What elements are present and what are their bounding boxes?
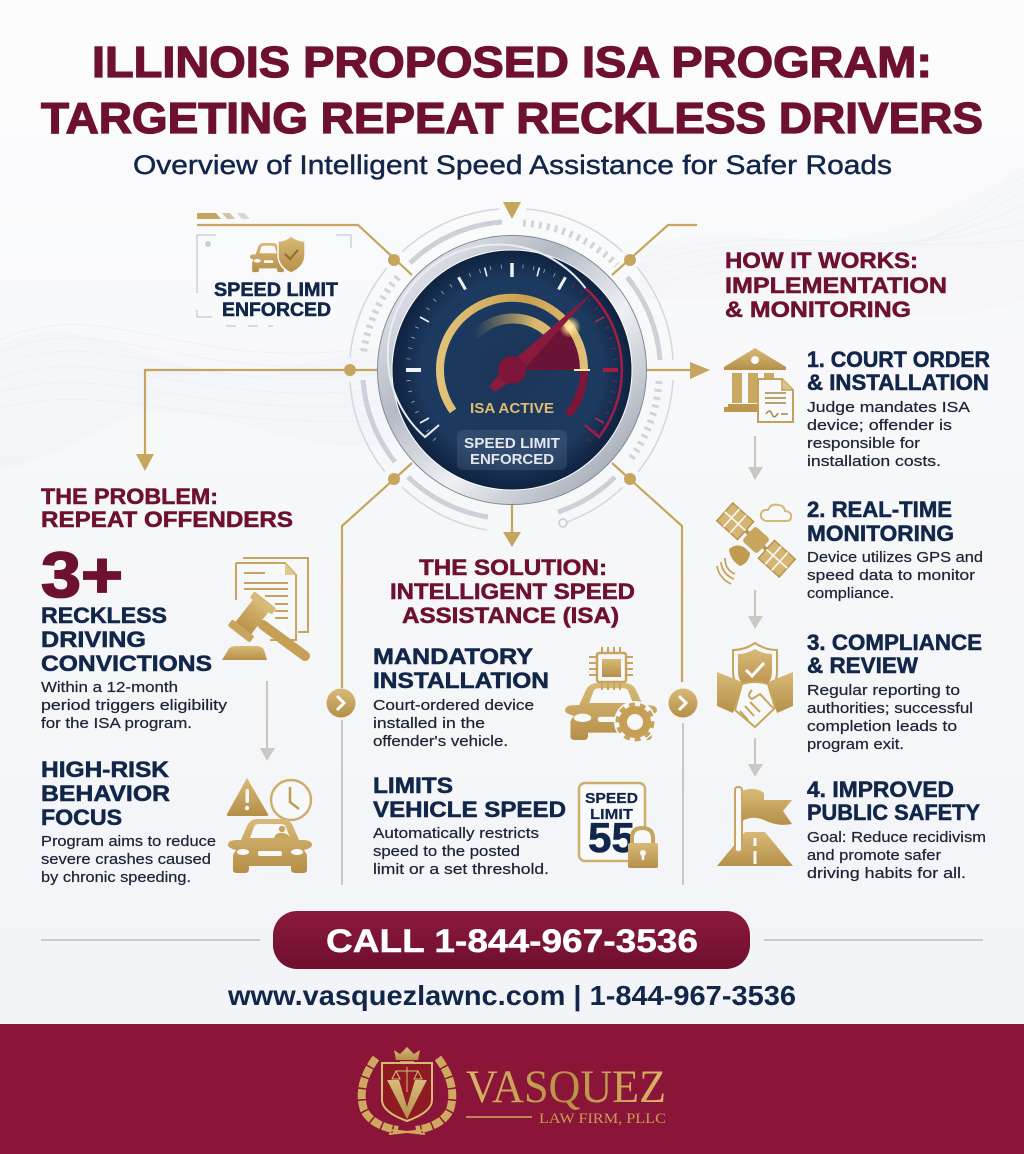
icon: car and shield (250, 236, 305, 273)
step 2 text: Device utilizes GPS and (807, 550, 983, 566)
background wave: left (0, 324, 400, 470)
step 4 text: driving habits for all. (807, 866, 966, 882)
heading: the problem (41, 484, 293, 532)
stat: 3+: 3+ (41, 539, 123, 611)
installation description: offender's vehicle. (373, 734, 508, 750)
high-risk description: by chronic speeding. (41, 870, 191, 886)
panel: speed limit enforced badge (197, 213, 351, 326)
step 1 heading: & INSTALLATION (807, 370, 989, 395)
heading: how it works: IMPLEMENTATION (725, 273, 947, 298)
gauge inner arcs (474, 318, 550, 336)
icon: speed limit sign and lock: LIMIT (590, 807, 633, 823)
step 3 heading: & REVIEW (807, 653, 919, 678)
heading: mandatory installation: INSTALLATION (373, 668, 549, 693)
panel: the solution (373, 555, 658, 878)
step 1 text: installation costs. (807, 454, 941, 470)
connector: bottom left (326, 463, 412, 885)
step 2 text (807, 550, 983, 602)
arrow down (748, 590, 763, 629)
stat label: DRIVING (41, 627, 146, 652)
step 3 heading (807, 630, 982, 678)
step 1 text (807, 400, 970, 470)
step 2 (807, 497, 983, 602)
badge text: ENFORCED (222, 299, 331, 321)
heading: high-risk behavior focus: HIGH-RISK (41, 757, 170, 782)
step 2 heading: 2. REAL-TIME (807, 497, 952, 522)
badge text (214, 279, 338, 321)
heading: high-risk behavior focus: FOCUS (41, 805, 122, 830)
step 3 text (807, 683, 973, 753)
step 1 (807, 347, 990, 470)
connector: top left (197, 225, 412, 275)
limits description: Automatically restricts (373, 826, 539, 842)
stat label: CONVICTIONS (41, 651, 212, 676)
gauge gold arc (440, 298, 584, 411)
heading: the solution: THE SOLUTION: (419, 555, 607, 580)
stat label (41, 603, 212, 676)
decorative tabs (197, 213, 250, 219)
icon: shield and handshake (717, 643, 793, 727)
heading: mandatory installation: MANDATORY (373, 644, 533, 669)
high-risk description: severe crashes caused (41, 852, 211, 868)
installation description: installed in the (373, 716, 485, 732)
heading: mandatory installation (373, 644, 549, 693)
step 4 heading: 4. IMPROVED (807, 777, 954, 802)
heading: the solution: INTELLIGENT SPEED (390, 579, 635, 604)
icon: speed limit sign and lock (579, 783, 658, 868)
installation description: Court-ordered device (373, 698, 534, 714)
heading: limits vehicle speed: LIMITS (373, 773, 453, 798)
gauge maroon arc (568, 370, 584, 415)
step 1 text: Judge mandates ISA (807, 400, 970, 416)
arrow down (748, 436, 763, 480)
logo subline: LAW FIRM, PLLC (539, 1111, 666, 1127)
title: ILLINOIS PROPOSED ISA PROGRAM: (92, 38, 932, 87)
gauge major ticks (406, 263, 618, 423)
heading: how it works (725, 248, 947, 322)
panel: the problem (41, 484, 312, 886)
arrow down (748, 738, 763, 777)
limits description: speed to the posted (373, 844, 520, 860)
step 3 text: completion leads to (807, 719, 957, 735)
speed limit enforced display: SPEED LIMIT (464, 435, 560, 452)
arrow: gauge to how it works (647, 362, 710, 379)
gauge white arc (388, 244, 586, 437)
connector: top right (612, 225, 697, 275)
panel: how it works (717, 248, 990, 882)
step 3 text: authorities; successful (807, 701, 973, 717)
speed limit enforced display (457, 430, 567, 470)
icon: satellite (717, 503, 795, 584)
step 4 heading: PUBLIC SAFETY (807, 800, 980, 825)
logo wordmark: VASQUEZ (466, 1061, 666, 1113)
contact line: www.vasquezlawnc.com | 1-844-967-3536 (227, 980, 796, 1011)
subtitle: Overview of Intelligent Speed Assistance for Safer Roads (133, 150, 892, 180)
gauge minor ticks (406, 264, 618, 442)
step 2 text: speed data to monitor (807, 568, 975, 584)
speedometer gauge (377, 235, 647, 505)
heading: how it works: & MONITORING (725, 297, 911, 322)
gauge red zone arc (585, 288, 622, 437)
icon: warning, clock and car (227, 778, 312, 873)
arrow: gauge to the problem (136, 364, 377, 471)
badge text: SPEED LIMIT (214, 279, 338, 301)
stat description (41, 680, 228, 732)
speed limit enforced display: ENFORCED (470, 451, 554, 468)
step 2 heading: MONITORING (807, 521, 954, 546)
logo (362, 1047, 666, 1134)
step 3 text: Regular reporting to (807, 683, 960, 699)
step 1 heading (807, 347, 990, 395)
call to action: CALL 1-844-967-3536 (326, 923, 698, 959)
ISA active label: ISA ACTIVE (470, 400, 554, 417)
icon: courthouse and document (724, 348, 793, 422)
step 4 text (807, 830, 986, 882)
step 3 (807, 630, 982, 753)
top marker triangle (503, 202, 521, 219)
heading: the problem: REPEAT OFFENDERS (41, 507, 293, 532)
step 1 heading: 1. COURT ORDER (807, 347, 990, 372)
title (41, 38, 983, 143)
gauge red wedge (524, 318, 582, 370)
background wave: right (640, 165, 1024, 316)
call to action (41, 911, 983, 969)
arrow: gauge to solution (503, 503, 521, 547)
heading: limits vehicle speed (373, 773, 566, 822)
installation description (373, 698, 534, 750)
icon: flag and road (717, 787, 793, 866)
step 4 (807, 777, 986, 882)
high-risk description: Program aims to reduce (41, 834, 216, 850)
heading: the solution: ASSISTANCE (ISA) (402, 603, 619, 628)
limits description: limit or a set threshold. (373, 862, 549, 878)
step 4 heading (807, 777, 980, 825)
step 2 heading (807, 497, 954, 546)
heading: how it works: HOW IT WORKS: (725, 248, 918, 273)
logo crest (362, 1047, 452, 1134)
stat description: Within a 12-month (41, 680, 178, 696)
heading: limits vehicle speed: VEHICLE SPEED (373, 797, 566, 822)
heading: high-risk behavior focus (41, 757, 170, 830)
gauge decorative rings (350, 209, 673, 530)
connector: bottom right (612, 463, 698, 885)
step 3 text: program exit. (807, 737, 904, 753)
stat description: for the ISA program. (41, 716, 192, 732)
icon: chip, car and gear (565, 647, 657, 743)
step 4 text: and promote safer (807, 848, 941, 864)
gauge glow (559, 316, 590, 370)
gauge needle (489, 292, 593, 392)
stat description: period triggers eligibility (41, 698, 228, 714)
heading: the solution (390, 555, 635, 628)
heading: high-risk behavior focus: BEHAVIOR (41, 781, 170, 806)
footer band (0, 1024, 1024, 1154)
step 2 text: compliance. (807, 586, 894, 602)
step 4 text: Goal: Reduce recidivism (807, 830, 986, 846)
high-risk description (41, 834, 216, 886)
step 3 heading: 3. COMPLIANCE (807, 630, 982, 655)
arrow down (260, 681, 275, 761)
icon: speed limit sign and lock: SPEED (585, 791, 638, 807)
limits description (373, 826, 549, 878)
stat label: RECKLESS (41, 603, 167, 628)
step 1 text: responsible for (807, 436, 920, 452)
title: TARGETING REPEAT RECKLESS DRIVERS (41, 94, 983, 143)
bracket frame (197, 235, 351, 326)
step 1 text: device; offender is (807, 418, 952, 434)
icon: gavel and documents (222, 558, 308, 660)
icon: speed limit sign and lock: 55 (588, 814, 635, 861)
heading: the problem: THE PROBLEM: (41, 484, 218, 509)
